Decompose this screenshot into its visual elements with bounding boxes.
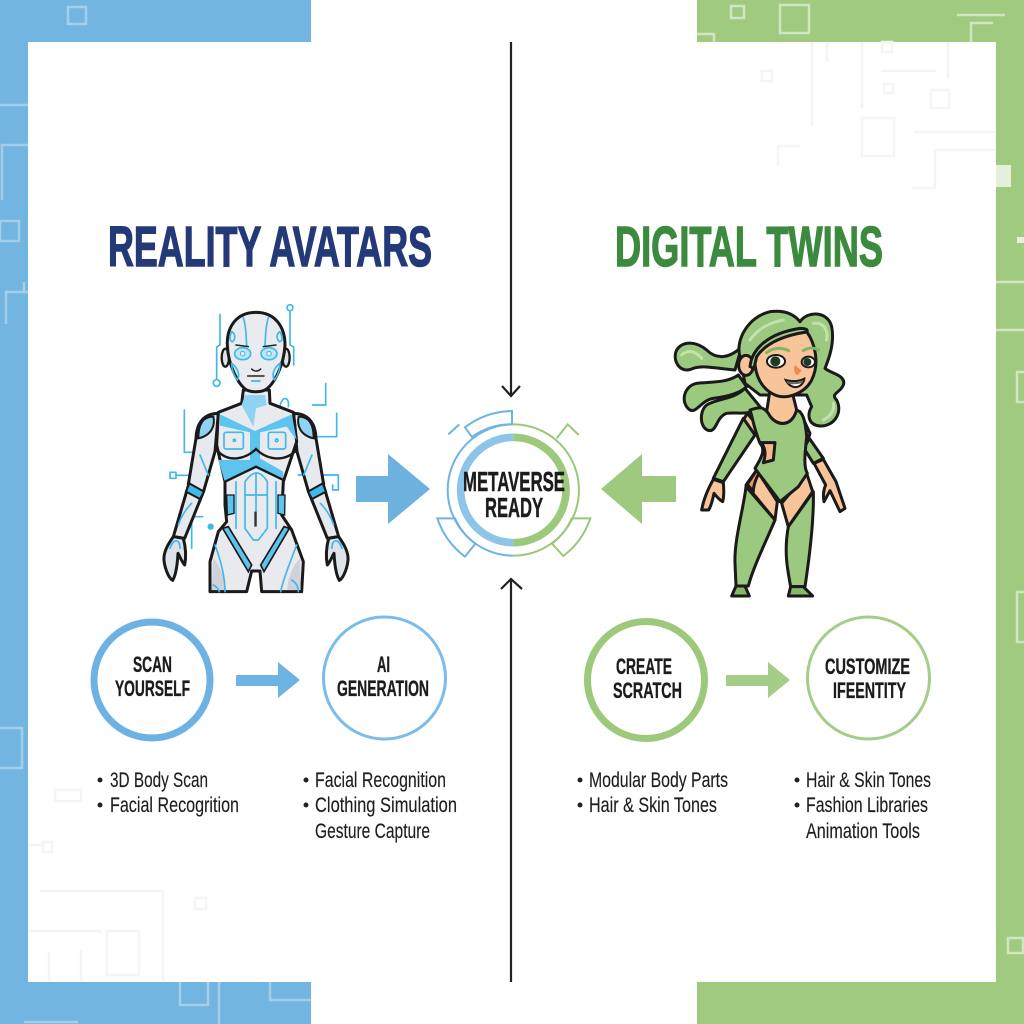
- list: customize identity features: [794, 769, 931, 843]
- node: scan yourself: SCAN: [133, 652, 172, 677]
- list: create scratch features: Modular Body Parts: [589, 769, 728, 792]
- robot torso and legs: [210, 390, 303, 592]
- left arm and sleeve: [702, 413, 759, 510]
- robot dark chest lines: [218, 449, 295, 482]
- node: customize identity: IFEENTITY: [833, 678, 906, 703]
- list: ai generation features: [304, 769, 457, 843]
- list: create scratch features: [578, 769, 728, 817]
- badge text: METAVERSE: [463, 466, 565, 497]
- list: ai generation features: Clothing Simulation: [315, 794, 457, 817]
- robot head: [222, 312, 290, 392]
- node: customize identity: [808, 617, 930, 739]
- back hair: [675, 311, 844, 431]
- list: create scratch features: Hair & Skin Tones: [589, 794, 717, 817]
- node: ai generation: AI: [377, 652, 390, 677]
- node: ai generation: GENERATION: [337, 676, 429, 701]
- green bodysuit: [750, 408, 807, 502]
- list: scan yourself features: [98, 769, 239, 817]
- node: scan yourself: [94, 622, 210, 738]
- arrow: green arrow to center: [601, 454, 676, 524]
- node: ai generation: [324, 617, 446, 739]
- list: scan yourself features: 3D Body Scan: [110, 769, 208, 792]
- robot chest and abdomen circuits: [213, 432, 298, 592]
- legs: [732, 470, 813, 596]
- panel: green corner background: [697, 0, 1024, 1024]
- waist cutout: [761, 443, 775, 463]
- list: scan yourself features: Facial Recogrition: [110, 794, 239, 817]
- right arm: [294, 413, 348, 580]
- list: ai generation features: Facial Recognition: [315, 769, 446, 792]
- circuit lines around robot: [170, 305, 338, 548]
- node: customize identity: CUSTOMIZE: [825, 654, 910, 679]
- center vertical line with upward arrow: [501, 579, 522, 982]
- panel: blue corner background: [0, 0, 311, 1024]
- list: customize identity features: Animation Tools: [806, 820, 920, 843]
- illustration: digital twin character: [675, 311, 845, 596]
- robot blue armor bands: [218, 395, 297, 572]
- robot leg shading: [212, 558, 301, 590]
- arrow: blue arrow to center: [356, 454, 430, 524]
- list: ai generation features: Gesture Capture: [315, 820, 430, 843]
- arrow: create to customize: [726, 662, 790, 698]
- center vertical line with downward arrow: [502, 42, 520, 396]
- node: create scratch: [588, 622, 704, 738]
- central metaverse ready badge: [437, 411, 590, 557]
- heading: reality avatars: REALITY AVATARS: [108, 215, 432, 279]
- illustration: reality avatar robot: [164, 305, 348, 592]
- node: create scratch: CREATE: [616, 654, 672, 679]
- hair highlights: [682, 320, 834, 420]
- right arm and sleeve: [800, 412, 845, 512]
- face and ear: [739, 328, 819, 397]
- central metaverse ready badge: READY: [485, 492, 543, 523]
- left arm: [164, 413, 218, 580]
- arrow: scan to ai: [236, 662, 300, 698]
- node: scan yourself: YOURSELF: [115, 676, 190, 701]
- list: customize identity features: Hair & Skin Tones: [806, 769, 931, 792]
- neck: [767, 390, 797, 423]
- list: customize identity features: Fashion Libraries: [806, 794, 928, 817]
- node: create scratch: SCRATCH: [613, 678, 682, 703]
